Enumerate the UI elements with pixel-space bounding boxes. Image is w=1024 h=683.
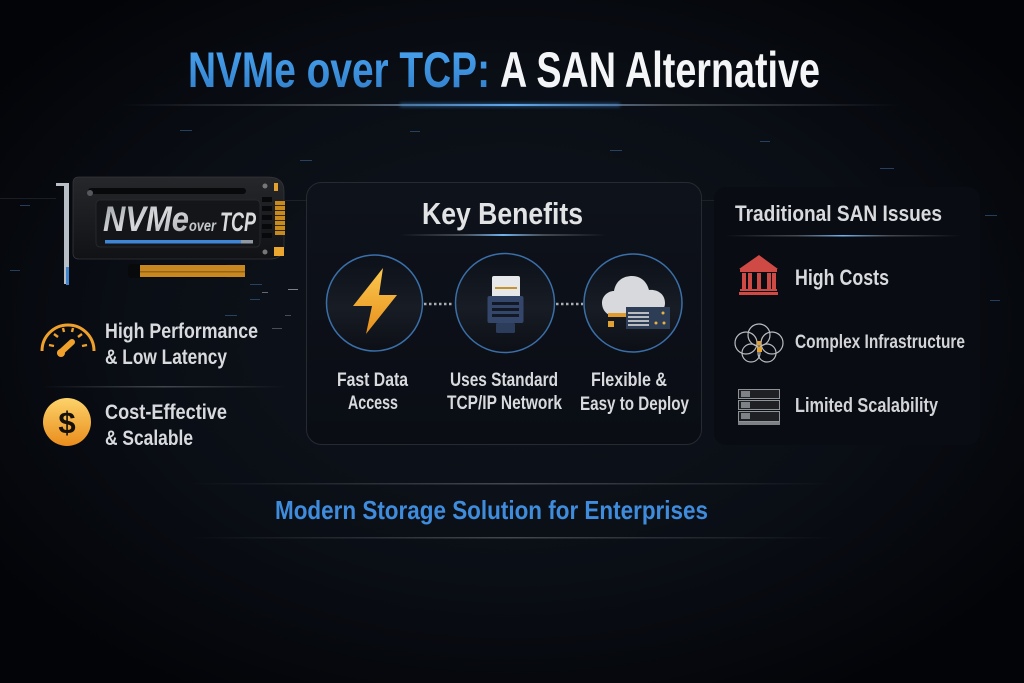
card body bbox=[73, 177, 284, 259]
icon: lightning bolt in circle bbox=[326, 255, 422, 351]
nameplate text: NVMe bbox=[103, 200, 189, 239]
label: uses standard tcp/ip network: Uses Standard bbox=[450, 370, 558, 391]
icon: NVMe over TCP network card: TCP bbox=[220, 207, 257, 237]
label: cost-effective: Cost-Effective bbox=[105, 401, 227, 424]
nameplate bbox=[96, 200, 260, 247]
icon: NVMe over TCP network card bbox=[56, 177, 285, 285]
title white part: A SAN Alternative bbox=[500, 42, 820, 98]
title bbox=[188, 42, 820, 98]
icon: cloud and server in circle bbox=[584, 254, 682, 352]
icon: NVMe over TCP network card: over bbox=[189, 218, 217, 235]
issue: high costs bbox=[739, 255, 889, 295]
label: flexible and easy to deploy: Easy to Deploy bbox=[580, 394, 689, 415]
label: high costs: High Costs bbox=[795, 265, 889, 290]
icon: ethernet plug in circle bbox=[456, 254, 554, 352]
heading: key benefits: Key Benefits bbox=[422, 196, 583, 231]
title blue part: NVMe over TCP: bbox=[188, 42, 490, 98]
issue: complex infrastructure bbox=[735, 324, 965, 362]
icon: speedometer gauge bbox=[42, 325, 94, 357]
label: fast data access: Fast Data bbox=[337, 370, 408, 391]
label: flexible and easy to deploy: Flexible & bbox=[591, 370, 667, 391]
panel: traditional SAN issues bbox=[714, 187, 980, 445]
label: flexible and easy to deploy bbox=[580, 370, 689, 415]
icon: dollar coin bbox=[43, 398, 91, 446]
title underline glow bbox=[120, 103, 900, 107]
icon: dollar coin: $ bbox=[58, 405, 76, 440]
card bracket bbox=[56, 183, 69, 284]
label: high performance: High Performance bbox=[105, 320, 258, 343]
label: complex infrastructure: Complex Infrastructure bbox=[795, 331, 965, 353]
label: limited scalability: Limited Scalability bbox=[795, 395, 939, 417]
left divider bbox=[42, 386, 287, 388]
icon: server rack bbox=[738, 390, 780, 425]
issue: limited scalability bbox=[738, 390, 939, 425]
left feature: high performance bbox=[42, 320, 258, 369]
gold edge connector bbox=[128, 264, 228, 278]
connector dots bbox=[424, 303, 583, 305]
label: fast data access: Access bbox=[348, 393, 398, 414]
footer tagline: Modern Storage Solution for Enterprises bbox=[275, 495, 708, 525]
heading: traditional SAN issues: Traditional SAN Issues bbox=[735, 201, 942, 226]
heading underline bbox=[400, 234, 606, 236]
left feature: high performance: & Low Latency bbox=[105, 346, 227, 369]
heading underline bbox=[725, 235, 961, 236]
label: uses standard tcp/ip network: TCP/IP Network bbox=[447, 393, 562, 414]
label: uses standard tcp/ip network bbox=[447, 370, 562, 414]
right gold contacts bbox=[275, 201, 285, 235]
icon: bank building bbox=[739, 255, 778, 295]
left feature: cost-effective: & Scalable bbox=[105, 427, 193, 450]
panel: key benefits bbox=[306, 182, 702, 444]
label: fast data access bbox=[337, 370, 408, 414]
background data specks bbox=[0, 130, 1000, 329]
left feature: cost-effective bbox=[43, 398, 227, 450]
bottom top rule bbox=[190, 483, 835, 484]
icon: tangled loops bbox=[735, 324, 783, 362]
bottom rule bbox=[190, 537, 835, 538]
nameplate blue bar bbox=[105, 240, 253, 244]
